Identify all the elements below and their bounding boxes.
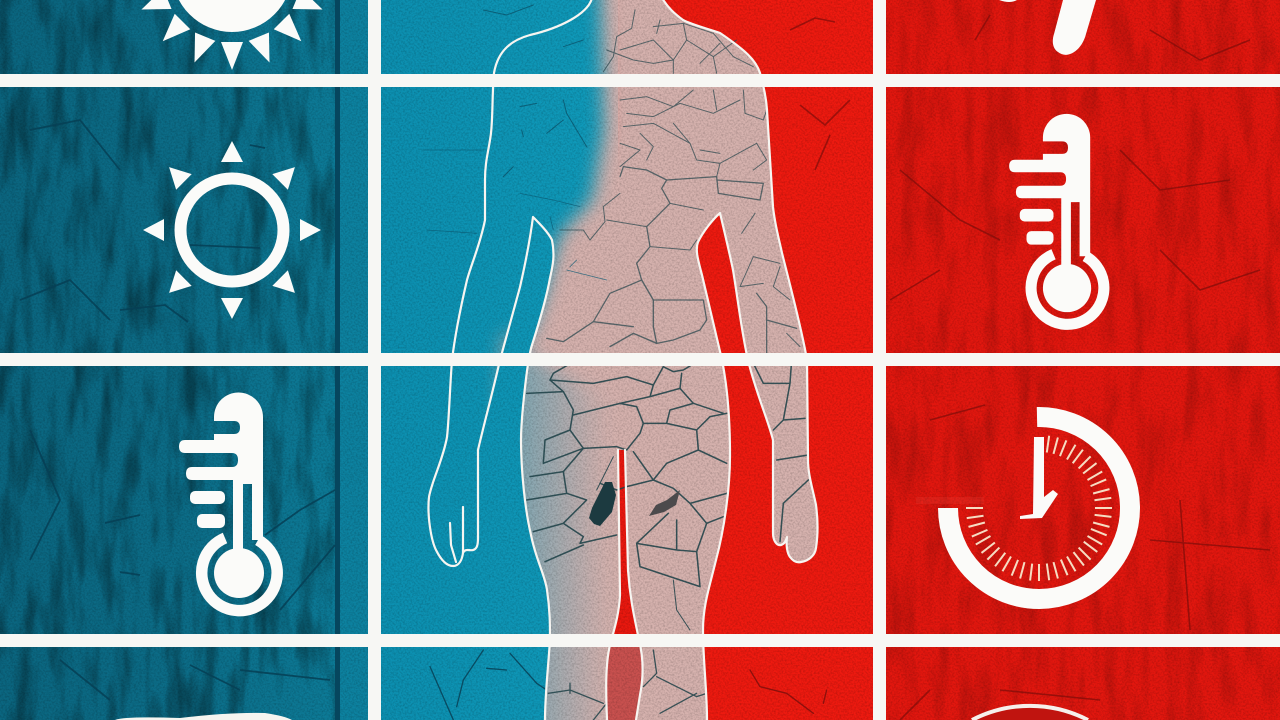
body outline [428, 0, 818, 720]
dark blotch: left thigh [589, 482, 616, 526]
icon: clock timer [916, 417, 1130, 599]
icon: cropped thermometer capsule at top right [999, 0, 1096, 55]
cracks: blue left column [20, 120, 335, 700]
body fill: cracked pale skin [488, 0, 816, 720]
icon: thermometer, hot side [1009, 114, 1104, 324]
panel: centre red half [618, 0, 879, 720]
panel: right hot column [879, 0, 1280, 720]
cracks: lower body [527, 360, 808, 630]
inner leg gap: muted red below the grid line [606, 647, 643, 720]
cracks: bottom row [430, 650, 827, 720]
cracks: red background [790, 15, 1270, 720]
dark blotch: right thigh [649, 490, 680, 516]
icon: sun ring [143, 141, 321, 319]
icon: sun cropped at top [137, 0, 327, 70]
cracks: upper body [423, 5, 800, 360]
panel: centre blue half [374, 0, 618, 720]
icon: cropped white shape at bottom left [115, 713, 292, 720]
icon: thermometer, cold side [179, 392, 277, 611]
panel: left cold column [0, 0, 374, 720]
inner leg gap: red [610, 450, 639, 640]
icon: cropped circle at bottom right [972, 706, 1088, 720]
